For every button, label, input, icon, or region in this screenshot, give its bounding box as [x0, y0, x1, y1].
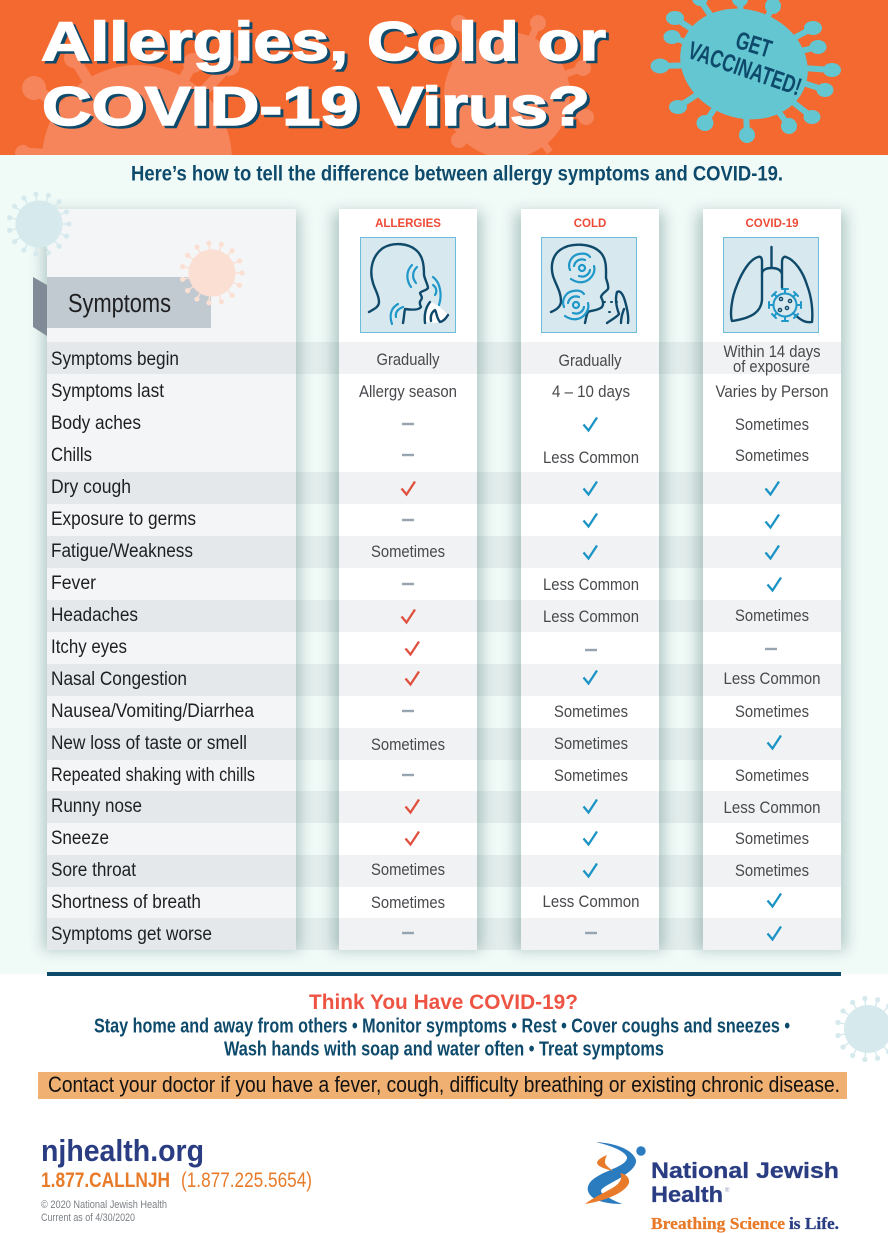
- row: Body aches: Sometimes: [735, 416, 809, 434]
- row: Runny nose: Runny nose: [51, 796, 142, 817]
- row: Headaches: Sometimes: [735, 607, 809, 625]
- advice text: Wash hands with soap and water often • Treat symptoms: [224, 1038, 664, 1060]
- row: Repeated shaking with chills: [51, 765, 809, 786]
- white lower section: [0, 974, 888, 1233]
- mint body panel: [0, 155, 888, 974]
- column shadows: [43, 212, 846, 950]
- copyright: Current as of 4/30/2020: [41, 1212, 135, 1224]
- heading: covid-19: COVID-19: [745, 218, 799, 230]
- row: Repeated shaking with chills: Repeated shaking with chills: [51, 765, 255, 786]
- badge: get vaccinated virus: VACCINATED!: [684, 36, 805, 101]
- row: Chills: Sometimes: [735, 447, 809, 465]
- row: Headaches: [47, 600, 841, 632]
- row: Symptoms begin: Symptoms begin: [51, 349, 179, 370]
- logo: national jewish health: is Life.: [789, 1214, 839, 1233]
- row: New loss of taste or smell: [47, 728, 841, 760]
- row: Runny nose: Less Common: [724, 799, 820, 817]
- row: Symptoms last: Varies by Person: [716, 383, 828, 401]
- logo: national jewish health: ®: [725, 1187, 730, 1194]
- row: Chills: [51, 445, 809, 467]
- row: New loss of taste or smell: New loss of taste or smell: [51, 733, 247, 754]
- background virus: middle: [434, 15, 594, 158]
- row: Symptoms last: Allergy season: [359, 383, 457, 401]
- row: Nausea/Vomiting/Diarrhea: Nausea/Vomiting/Diarrhea: [51, 701, 254, 722]
- row: Nausea/Vomiting/Diarrhea: Sometimes: [735, 703, 809, 721]
- icon: allergies head sneezing: [360, 238, 456, 332]
- row: Chills: Chills: [51, 445, 92, 466]
- icon: helix: [585, 1142, 646, 1204]
- contact phone: 1.877.CALLNJH: [41, 1169, 170, 1192]
- badge: get vaccinated virus: [650, 0, 841, 143]
- background virus: left: [15, 53, 240, 155]
- row: Sore throat: Sometimes: [371, 861, 445, 879]
- badge: get vaccinated virus: GET: [732, 26, 775, 64]
- row: Sore throat: Sore throat: [51, 860, 137, 881]
- subtitle: Here’s how to tell the difference between allergy symptoms and COVID-19.: [131, 162, 783, 186]
- copyright: [41, 1199, 167, 1224]
- heading tab: symptoms: [33, 277, 211, 336]
- logo: national jewish health: Breathing Science: [651, 1214, 785, 1233]
- logo: national jewish health: Health: [651, 1182, 723, 1207]
- icon: cold head with hand: [542, 238, 636, 332]
- decorative virus: blue: [7, 192, 72, 256]
- copyright: © 2020 National Jewish Health: [41, 1199, 167, 1211]
- row: Fatigue/Weakness: Fatigue/Weakness: [51, 541, 193, 562]
- row: Sore throat: Sometimes: [735, 862, 809, 880]
- heading: cold: COLD: [574, 218, 606, 230]
- row: Nasal Congestion: [47, 664, 841, 696]
- row: Itchy eyes: Itchy eyes: [51, 637, 127, 658]
- row: Sneeze: Sneeze: [51, 828, 109, 849]
- row: Symptoms begin: [47, 342, 841, 376]
- row: Fatigue/Weakness: [47, 536, 841, 568]
- header banner: [0, 0, 888, 155]
- row: Repeated shaking with chills: Sometimes: [735, 767, 809, 785]
- contact website: njhealth.org: [41, 1133, 204, 1168]
- panel: covid column: [703, 209, 841, 950]
- heading tab: symptoms: Symptoms: [68, 290, 171, 318]
- row: Sneeze: [51, 828, 809, 849]
- row: Shortness of breath: Shortness of breath: [51, 892, 201, 913]
- row: Dry cough: [47, 472, 841, 504]
- title: COVID-19 Virus?: [45, 78, 593, 140]
- icon: covid lungs with virus: [724, 238, 818, 332]
- callout heading: Think You Have COVID-19?: [309, 991, 578, 1014]
- row: Chills: Less Common: [543, 449, 639, 467]
- panel: allergies column: [339, 209, 477, 950]
- row: Headaches: Headaches: [51, 605, 138, 626]
- row: Symptoms begin: Gradually: [558, 352, 622, 370]
- row: Nausea/Vomiting/Diarrhea: Sometimes: [554, 703, 628, 721]
- row: Runny nose: [47, 791, 841, 823]
- row: Fever: Less Common: [543, 576, 639, 594]
- row: Body aches: Body aches: [51, 413, 141, 434]
- row: Itchy eyes: [51, 637, 777, 658]
- row: Symptoms begin: Gradually: [376, 351, 440, 369]
- row: Symptoms get worse: [47, 918, 841, 950]
- row: Sore throat: [47, 855, 841, 887]
- row: Symptoms get worse: Symptoms get worse: [51, 924, 212, 945]
- row: Sneeze: Sometimes: [735, 830, 809, 848]
- row: Body aches: [51, 413, 809, 434]
- row: Fever: Fever: [51, 573, 97, 594]
- row: New loss of taste or smell: Sometimes: [554, 735, 628, 753]
- panel: symptoms column: [47, 209, 296, 950]
- row: Symptoms begin: Within 14 days: [724, 343, 820, 361]
- contact phone: (1.877.225.5654): [181, 1169, 312, 1192]
- row: Fever: [51, 573, 781, 594]
- row: Nausea/Vomiting/Diarrhea: [51, 701, 809, 722]
- row: Symptoms last: 4 – 10 days: [552, 383, 630, 401]
- row: Shortness of breath: Less Common: [542, 893, 640, 911]
- contact phone: [41, 1169, 312, 1192]
- logo: national jewish health: National Jewish: [651, 1158, 839, 1183]
- row: Headaches: Less Common: [543, 608, 639, 626]
- row: New loss of taste or smell: Sometimes: [371, 736, 445, 754]
- row: Exposure to germs: [51, 509, 779, 530]
- heading: allergies: ALLERGIES: [375, 218, 441, 230]
- row: Shortness of breath: [51, 892, 781, 913]
- logo: national jewish health: [585, 1142, 839, 1233]
- row: Symptoms begin: of exposure: [733, 358, 810, 376]
- row: Repeated shaking with chills: Sometimes: [554, 767, 628, 785]
- row: Exposure to germs: Exposure to germs: [51, 509, 196, 530]
- decorative virus: peach: [180, 241, 245, 305]
- decorative virus: right: [835, 996, 888, 1062]
- row: Shortness of breath: Sometimes: [371, 894, 445, 912]
- title: [41, 20, 609, 129]
- row: Symptoms last: [51, 381, 828, 402]
- row: Symptoms last: Symptoms last: [51, 381, 165, 402]
- row: Nasal Congestion: Less Common: [724, 670, 820, 688]
- title: COVID-19 Virus?: [42, 75, 590, 137]
- title: Allergies, Cold or: [41, 10, 606, 72]
- row: Nasal Congestion: Nasal Congestion: [51, 669, 187, 690]
- title: Allergies, Cold or: [44, 12, 609, 74]
- advice text: [94, 1016, 790, 1060]
- row: Dry cough: Dry cough: [51, 477, 131, 498]
- panel: cold column: [521, 209, 659, 950]
- row: Fatigue/Weakness: Sometimes: [371, 543, 445, 561]
- navy rule: [47, 972, 841, 976]
